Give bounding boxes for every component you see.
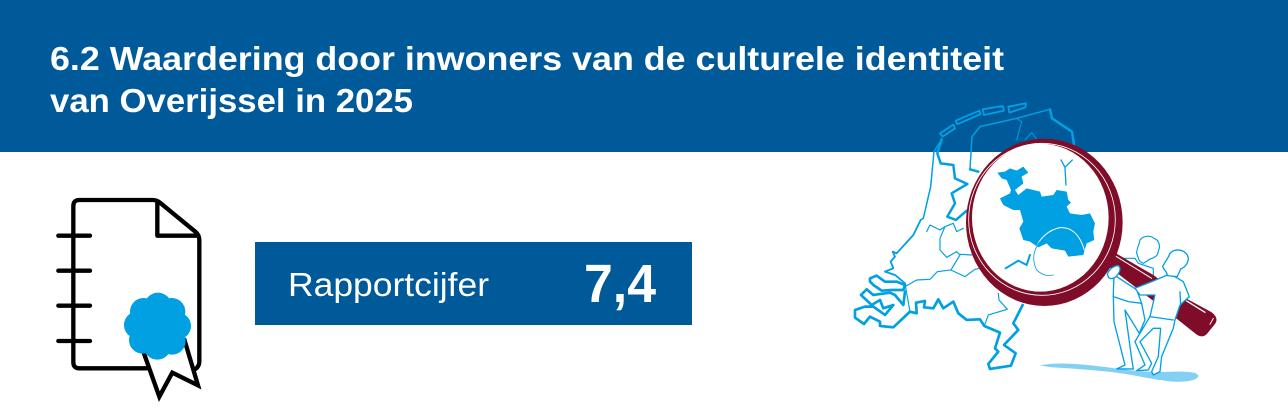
north coast (970, 109, 1050, 169)
shadow under people (1040, 363, 1198, 382)
title: 6.2 Waardering door inwoners van de culturele identiteit (50, 40, 1004, 77)
hand on handle (1107, 266, 1120, 279)
magnifier glass ring (966, 139, 1123, 306)
southern map (855, 220, 1023, 369)
header band (0, 0, 1288, 152)
score value: 7,4 (584, 254, 656, 314)
magnifier handle (1110, 253, 1217, 336)
west coast (921, 139, 942, 220)
score label: Rapportcijfer (288, 266, 489, 303)
title: van Overijssel in 2025 (50, 82, 413, 119)
Zeeland islands (870, 276, 905, 291)
IJsselmeer shore (937, 139, 967, 220)
person: man (1135, 250, 1189, 375)
Overijssel highlighted (997, 167, 1095, 257)
person: woman body and legs (1107, 266, 1145, 369)
map details inside the glass (997, 160, 1095, 276)
title (50, 40, 1004, 119)
rivers (1061, 160, 1072, 185)
Wadden islands (940, 103, 1026, 137)
map outline (855, 103, 1074, 369)
province borders (905, 223, 1007, 326)
south border (855, 289, 1023, 369)
illustration: map of the Netherlands with magnifier and people (855, 103, 1217, 382)
icon: blue seal (124, 293, 191, 360)
score panel (255, 242, 692, 325)
icon: report document with seal (58, 200, 199, 397)
person: woman head and back (1122, 236, 1159, 292)
glass reflection (1037, 228, 1084, 250)
west coast south (885, 220, 921, 283)
